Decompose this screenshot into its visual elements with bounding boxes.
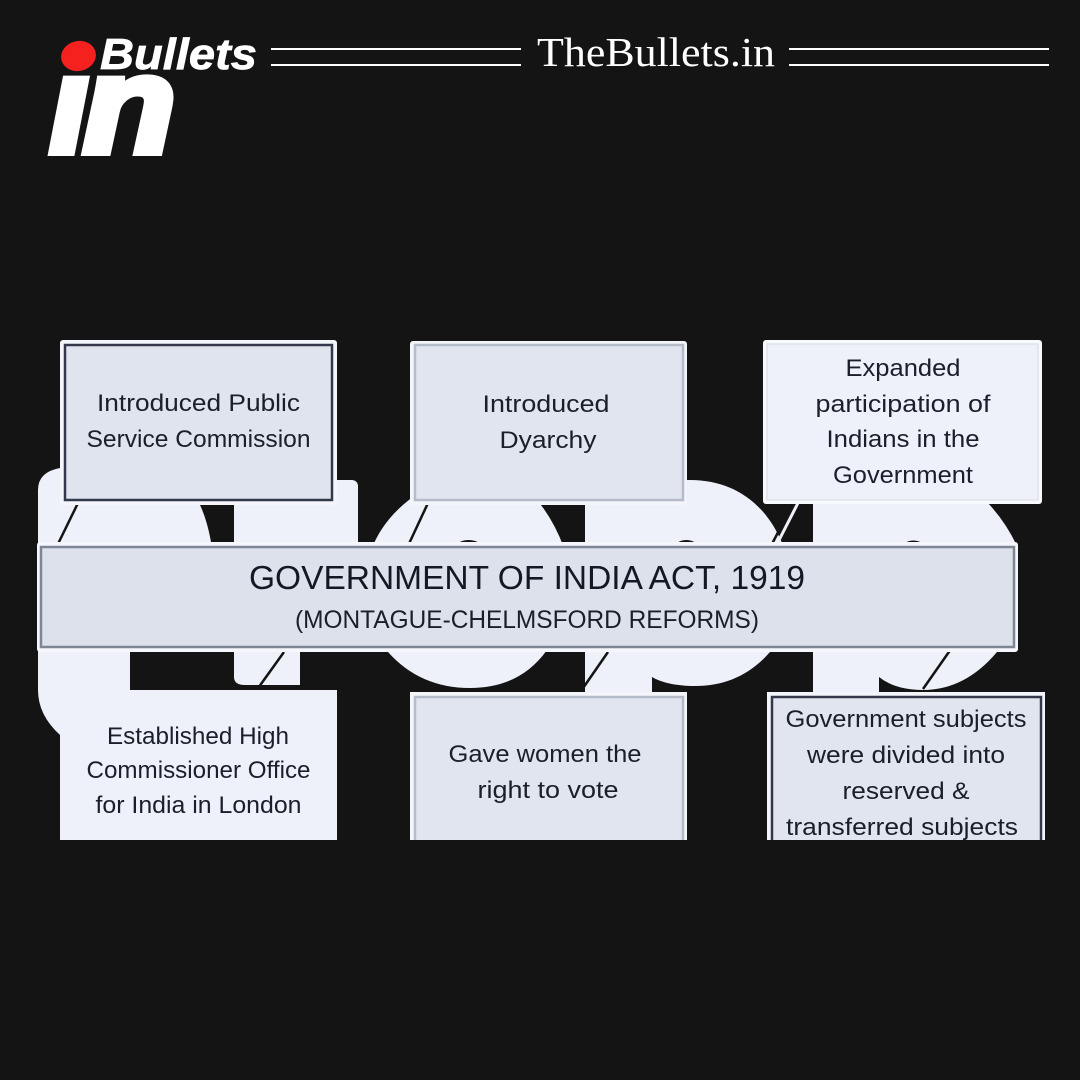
box: Government subjects: reserved & bbox=[842, 778, 970, 805]
box: Government subjects: transferred subjects bbox=[786, 814, 1018, 841]
inner counters above banner bbox=[456, 540, 924, 544]
box: High Commissioner: for India in London bbox=[96, 792, 302, 819]
box: Introduced Dyarchy bbox=[410, 341, 687, 505]
box: Expanded participation: Government bbox=[833, 462, 973, 489]
box: women vote: right to vote bbox=[478, 777, 618, 804]
box: Introduced Public Service Commission bbox=[60, 340, 337, 505]
logo: inBullets: Bullets bbox=[100, 30, 257, 79]
title banner: GOVERNMENT OF INDIA ACT, 1919 bbox=[249, 559, 805, 596]
box: High Commissioner bbox=[60, 690, 337, 840]
box: women vote: Gave women the bbox=[448, 741, 642, 768]
box: High Commissioner: Established High bbox=[107, 723, 289, 750]
box: Government subjects bbox=[767, 692, 1045, 841]
logo: inBullets: n bbox=[83, 28, 175, 181]
connector lines bbox=[56, 503, 951, 691]
title banner bbox=[37, 542, 1018, 652]
box: Introduced Public Service Commission: Introduced Public bbox=[97, 390, 300, 417]
box: Introduced Public Service Commission: Service Commission bbox=[86, 426, 310, 453]
line highlight bbox=[776, 503, 798, 546]
box: Introduced Dyarchy: Introduced bbox=[482, 391, 610, 418]
box: Introduced Dyarchy: Dyarchy bbox=[500, 427, 597, 454]
diagram bbox=[37, 340, 1045, 841]
title banner: (MONTAGUE-CHELMSFORD REFORMS) bbox=[295, 606, 759, 634]
box: Government subjects: were divided into bbox=[806, 742, 1005, 769]
header rule right bbox=[789, 48, 1049, 66]
logo: inBullets bbox=[30, 20, 257, 182]
site name: TheBullets.in bbox=[537, 29, 775, 75]
box: Expanded participation: Indians in the bbox=[826, 426, 980, 453]
box: High Commissioner: Commissioner Office bbox=[86, 757, 310, 784]
box: Expanded participation: participation of bbox=[816, 391, 991, 418]
box: women vote bbox=[410, 692, 687, 840]
logo: inBullets: i bbox=[50, 29, 91, 182]
box: Expanded participation bbox=[763, 340, 1042, 504]
box: Government subjects: Government subjects bbox=[786, 706, 1026, 733]
header rule left bbox=[271, 48, 521, 66]
box: Expanded participation: Expanded bbox=[846, 355, 960, 382]
background shapes bbox=[38, 468, 1018, 735]
